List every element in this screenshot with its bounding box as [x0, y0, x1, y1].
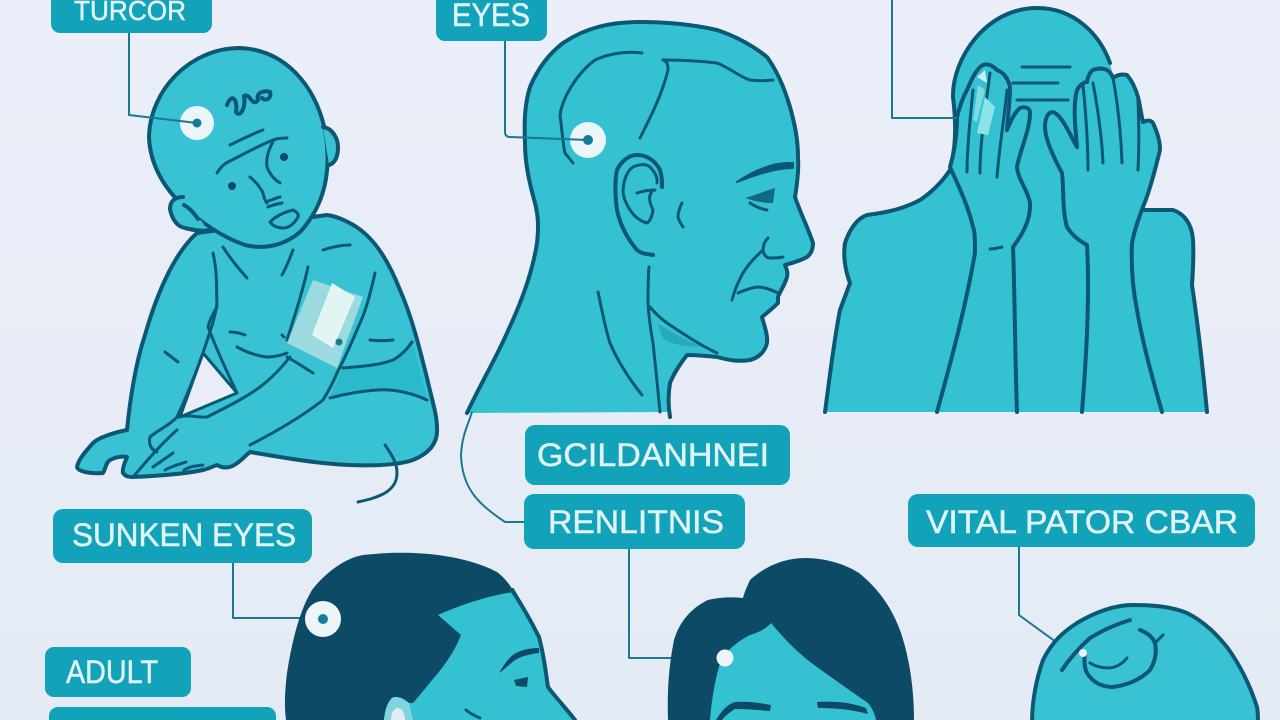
hair	[668, 558, 914, 720]
infant body	[77, 215, 437, 477]
person outline	[825, 8, 1207, 412]
figure: bottom right head	[1032, 605, 1258, 720]
face	[710, 623, 876, 720]
label: adult	[45, 647, 191, 697]
right hand	[1045, 68, 1162, 412]
eye swirl	[1062, 620, 1163, 687]
figure: bottom centre head	[668, 558, 914, 720]
infant head	[149, 48, 328, 247]
gap between arm and torso	[180, 353, 237, 417]
marker	[305, 601, 341, 637]
label: sunken eyes	[53, 509, 322, 618]
label: renlitnis: RENLITNIS	[548, 504, 724, 540]
label: adult: ADULT	[66, 654, 158, 690]
adult ear and face lines	[560, 52, 793, 412]
infant limb lines	[133, 245, 427, 502]
label: vital pator cbar: VITAL PATOR CBAR	[926, 504, 1238, 540]
infant face	[217, 91, 298, 228]
person details	[967, 67, 1139, 249]
label: cropped bottom	[49, 707, 276, 720]
label: vital pator cbar	[908, 494, 1255, 642]
figure: adult profile	[467, 22, 813, 417]
label: eyes	[436, 0, 588, 140]
neck shadow	[657, 323, 703, 347]
figure: bottom left head	[285, 553, 575, 720]
left hand	[937, 64, 1030, 412]
bandage on finger	[973, 70, 995, 135]
label: turgor	[51, 0, 212, 123]
infant right ear	[323, 127, 338, 165]
label: sunken eyes: SUNKEN EYES	[72, 517, 296, 553]
person fill	[825, 8, 1207, 412]
marker	[716, 650, 734, 666]
face details	[384, 590, 575, 720]
label: garbled heading: GCILDANHNEI	[537, 437, 769, 473]
connector: top centre right label	[892, 0, 957, 118]
adult head and neck fill	[467, 22, 813, 413]
hair	[285, 553, 514, 720]
bandage on arm	[287, 280, 363, 368]
figure: person covering face	[825, 8, 1207, 412]
diaper	[330, 342, 427, 398]
marker	[570, 122, 606, 158]
infant left ear	[170, 197, 208, 231]
face	[405, 588, 575, 720]
label: garbled heading	[525, 425, 790, 485]
marker	[180, 106, 214, 140]
figure: seated infant	[77, 48, 437, 502]
adult head outline	[467, 22, 813, 417]
label: renlitnis	[461, 412, 745, 658]
brows	[716, 702, 868, 720]
